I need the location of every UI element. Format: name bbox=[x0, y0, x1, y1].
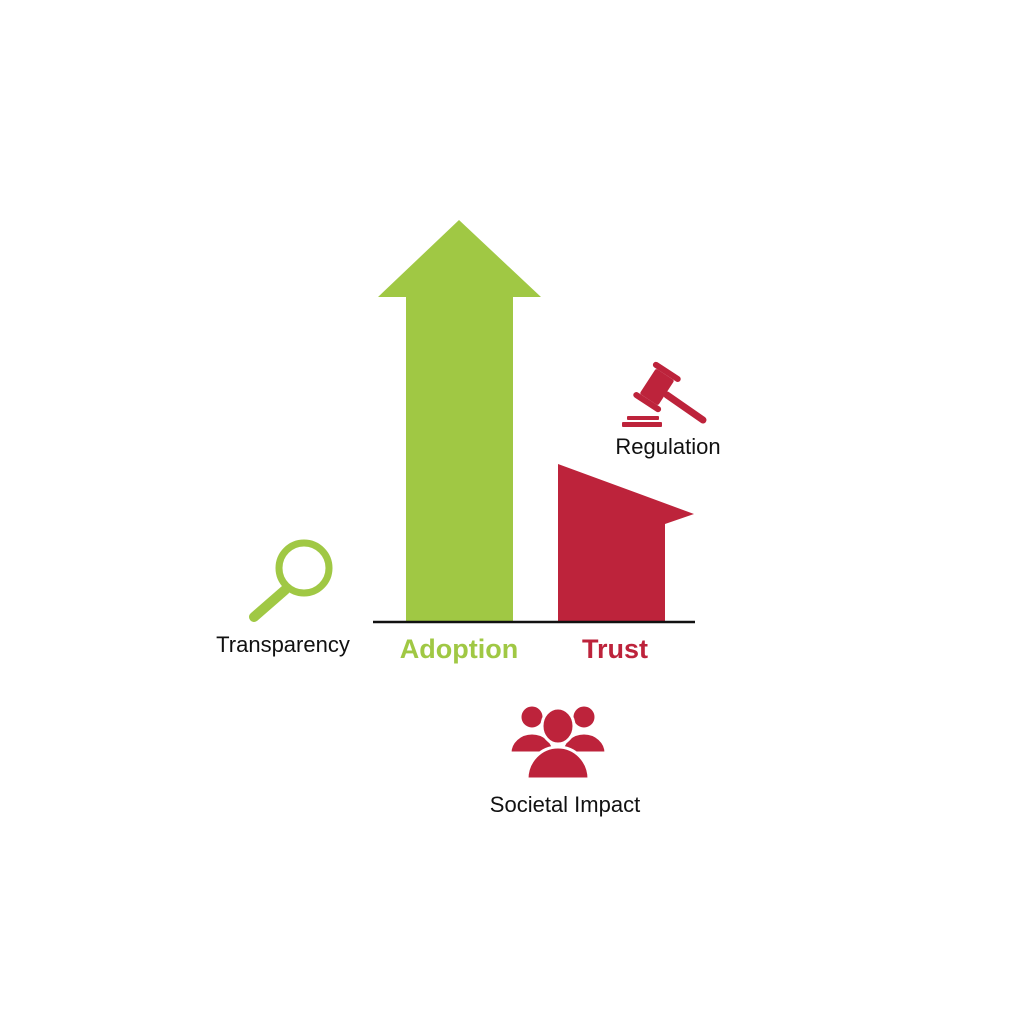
baseline bbox=[373, 621, 695, 623]
trust bar bbox=[558, 464, 694, 621]
label: Adoption: Adoption bbox=[400, 634, 518, 664]
adoption arrow bbox=[378, 220, 541, 621]
icon: people bbox=[510, 705, 606, 779]
icon: magnifier bbox=[254, 543, 329, 617]
label: Trust: Trust bbox=[582, 634, 648, 664]
icon: gavel bbox=[622, 361, 703, 427]
label: Regulation: Regulation bbox=[615, 434, 721, 459]
label: Transparency: Transparency bbox=[216, 632, 350, 657]
label: Societal Impact: Societal Impact bbox=[490, 792, 640, 817]
